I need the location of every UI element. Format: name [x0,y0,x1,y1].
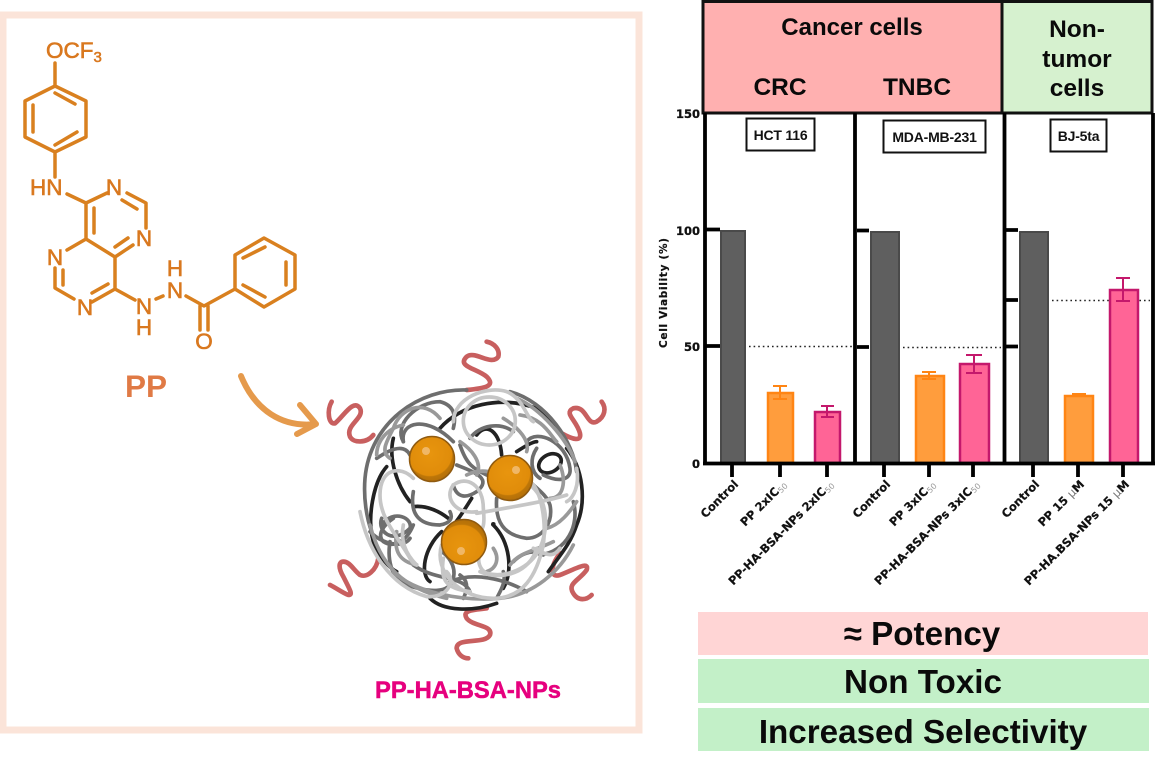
chemical structure: PP: N [136,226,152,251]
y axis labels: 150 [676,107,700,121]
header: cell types: cells [1050,75,1104,102]
header: cell types: Cancer cells [781,14,923,41]
nanoparticle [329,342,604,658]
label: PP-HA-BSA-NPs: PP-HA-BSA-NPs [375,677,561,704]
x axis labels: PP 2xIC [737,484,782,529]
label: PP: PP [125,368,167,404]
polymer coil [360,390,582,609]
header: cell types: CRC [753,74,807,101]
chemical structure: PP: N [77,295,93,320]
label: HCT 116 [746,118,814,150]
chemical structure: PP: N [136,294,152,319]
x axis labels: PP 15 μM [1035,477,1087,529]
bars: PP [768,376,1093,463]
summary: non toxic [698,659,1149,703]
x axis labels: 50 [925,481,939,495]
x axis labels: PP-HA.BSA-NPs 15 μM [1021,477,1132,588]
x axis labels: 50 [776,481,790,495]
axes [703,113,1155,477]
chemical structure: PP: H [136,315,152,340]
x axis labels: PP 3xIC [886,484,931,529]
x axis labels: Control [999,477,1042,521]
summary: potency: ≈ Potency [844,616,1001,653]
bars: controls [721,231,1048,463]
chemical structure: PP: HN [30,175,62,200]
y axis labels: 100 [676,224,700,238]
error bars [773,278,1130,417]
y axis labels [658,107,700,471]
drug spheres [410,436,532,564]
label: BJ-5ta: BJ-5ta [1058,128,1100,144]
x axis labels: 50 [823,481,837,495]
label: MDA-MB-231: MDA-MB-231 [892,129,977,145]
header: cell types: Non- [1049,16,1105,43]
label: HCT 116: HCT 116 [754,127,808,143]
chemical structure: PP: O [195,329,213,354]
chemical structure: PP: N [167,278,183,303]
y axis labels: 50 [684,340,700,354]
x axis labels: Control [850,477,893,521]
header: non-tumor cells [1002,2,1152,113]
panel: left frame [3,15,639,730]
chemical structure: PP: N [47,245,63,270]
x axis labels: Control [698,477,741,521]
chemical structure: PP: H [167,256,183,281]
chemical structure: PP: OCF [46,38,94,63]
summary: non toxic: Non Toxic [844,664,1002,701]
reference lines [749,300,1150,348]
x axis labels [698,477,1132,589]
x axis labels: 50 [969,481,983,495]
arrow [241,376,316,434]
label: MDA-MB-231 [884,120,986,152]
summary: increased selectivity [698,708,1149,751]
header: cell types [703,2,1152,113]
chemical structure: PP: N [106,175,122,200]
header: cancer cells [703,2,1002,113]
x axis labels: PP-HA-BSA-NPs 3xIC [871,484,975,588]
x axis labels: PP-HA-BSA-NPs 2xIC [725,484,829,588]
y axis labels: 0 [692,457,700,471]
y axis labels: Cell Viability (%) [658,238,670,348]
header: cell types: tumor [1042,46,1112,73]
chemical structure: PP: 3 [94,49,102,66]
hyaluronic acid strands [329,342,604,658]
bar chart: cell viability [658,107,1155,589]
summary: increased selectivity: Increased Selectivity [759,714,1088,751]
chemical structure: PP [25,38,295,354]
bars: PP-HA-BSA-NPs [815,290,1138,463]
label: BJ-5ta [1050,120,1106,152]
summary: potency [698,612,1148,655]
header: cell types: TNBC [883,74,951,101]
